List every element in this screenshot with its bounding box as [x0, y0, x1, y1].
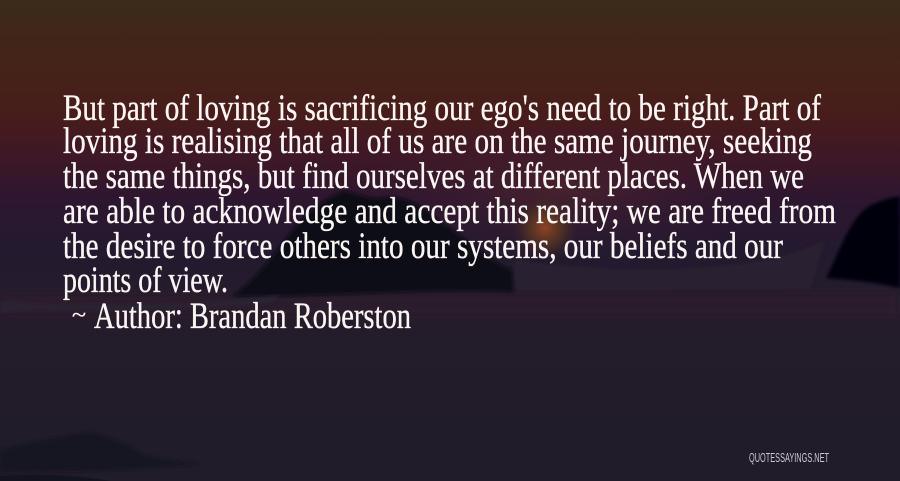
- author attribution: ~: [72, 302, 86, 327]
- quote text: [63, 88, 836, 301]
- horizon band: [0, 292, 900, 318]
- left headland silhouette: [0, 432, 200, 472]
- central island silhouette: [232, 191, 514, 296]
- sun glow: [340, 120, 780, 262]
- haze over the water horizon: [510, 240, 825, 291]
- author attribution: Author: Brandan Roberston: [94, 296, 411, 337]
- pale shore in front of central island: [0, 295, 280, 312]
- right island silhouette: [826, 196, 900, 288]
- watermark: QUOTESSAYINGS.NET: [749, 450, 829, 465]
- bottom dark strip: [0, 475, 110, 481]
- quote line 6: points of view.: [63, 260, 228, 301]
